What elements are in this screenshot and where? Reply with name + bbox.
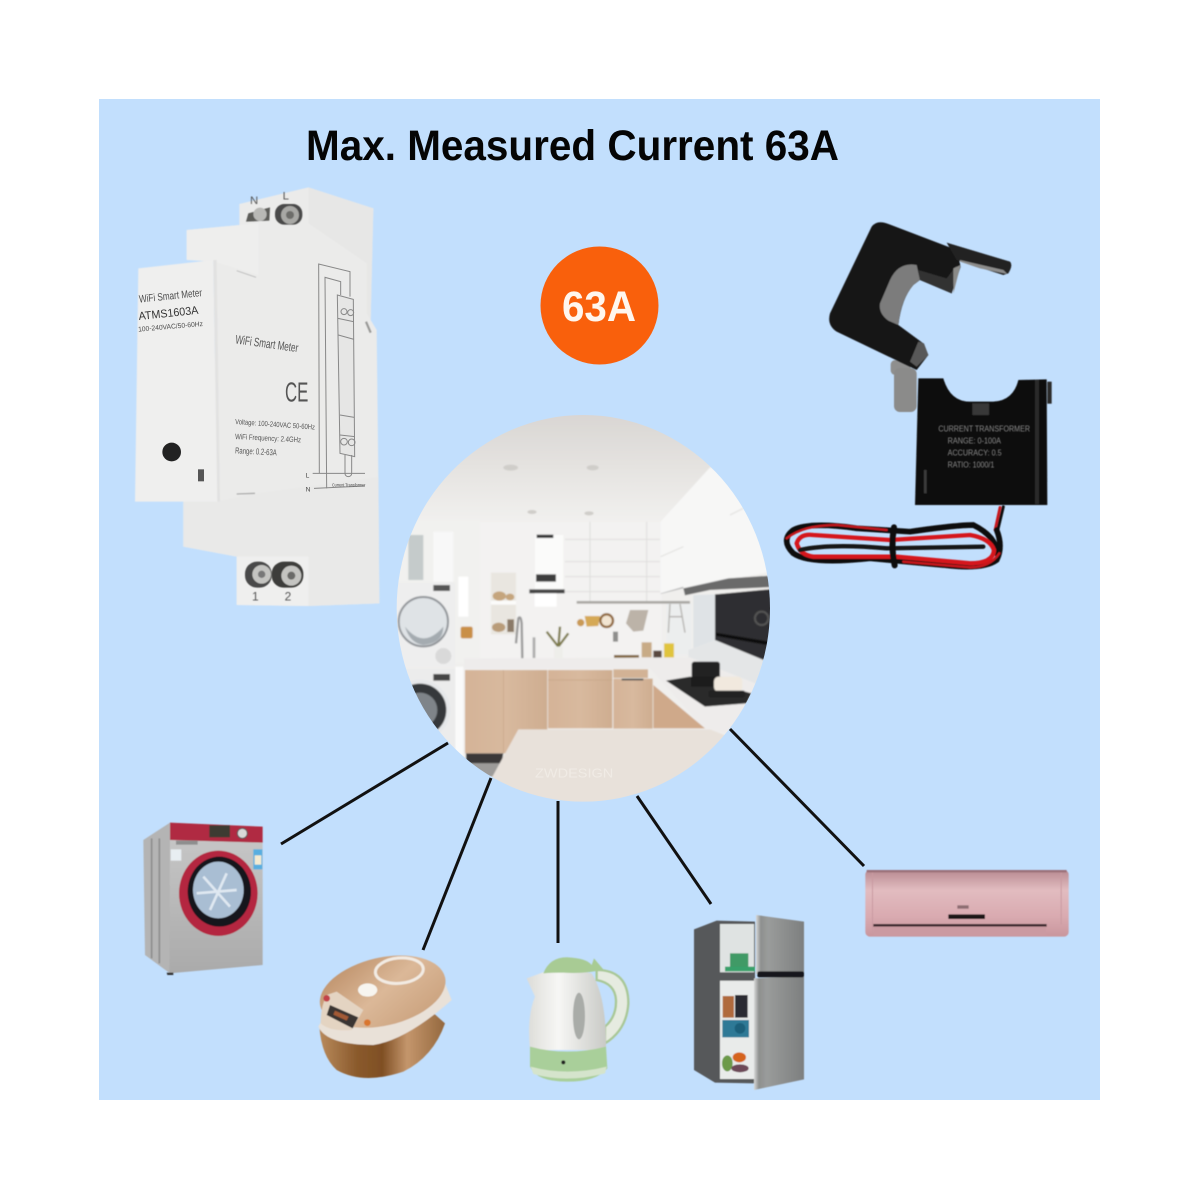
clamp upper jaw <box>829 222 1011 370</box>
side label: Range: 0.2-63A <box>235 445 277 458</box>
countertop <box>478 656 754 685</box>
upper cabinets <box>661 468 766 594</box>
indicator button <box>162 443 204 481</box>
bottom terminals: 1 <box>252 590 259 604</box>
badge: 63A <box>540 246 658 364</box>
ceiling <box>442 415 710 484</box>
air conditioner <box>865 870 1069 937</box>
sink and plant <box>514 616 570 659</box>
top terminals: L <box>283 190 289 202</box>
wiring labels <box>306 472 366 493</box>
current transformer clamp <box>787 222 1052 567</box>
wall boiler <box>529 535 565 607</box>
front label: WiFi Smart Meter <box>138 287 203 306</box>
floor and toe kick <box>457 753 503 777</box>
front label: 100-240VAC/50-60Hz <box>138 321 204 334</box>
smart meter device <box>135 187 379 606</box>
wall niche <box>491 573 516 634</box>
background panel <box>99 99 1100 1100</box>
clamp specification text <box>938 425 1030 469</box>
counter items <box>614 642 674 662</box>
front label <box>138 287 204 334</box>
appliances: washer, rice cooker, kettle <box>143 823 628 1082</box>
refrigerator <box>694 915 804 1090</box>
oven and backsplash <box>689 588 770 683</box>
rice cooker <box>313 944 453 1078</box>
appliances: fridge, air conditioner <box>694 870 1069 1090</box>
wiring labels: Current Transformer <box>332 482 366 488</box>
clamp lower body <box>915 378 1052 505</box>
side label: CE <box>285 377 308 408</box>
stacked washer and dryer <box>390 577 473 757</box>
connector lines <box>281 729 864 950</box>
foreground countertop <box>492 728 724 802</box>
coiled cable <box>787 507 1003 567</box>
back wall tiles <box>589 538 648 593</box>
left wall and window <box>408 532 453 581</box>
wiring labels: L <box>306 472 310 479</box>
bottom terminals <box>245 562 303 604</box>
clamp specification text: CURRENT TRANSFORMER <box>938 425 1030 434</box>
cooktop and pots <box>666 662 752 707</box>
wood cabinets <box>465 669 705 753</box>
clamp specification text: RATIO: 1000/1 <box>948 459 995 469</box>
washing machine <box>143 823 263 975</box>
kettle <box>527 957 628 1082</box>
clamp specification text: RANGE: 0-100A <box>948 435 1001 445</box>
top terminals <box>246 190 302 225</box>
watermark: ZWDESIGN <box>535 766 613 781</box>
kitchen photo circle <box>390 410 780 810</box>
side label: WiFi Frequency: 2.4GHz <box>235 432 301 444</box>
infographic canvas <box>99 99 1100 1100</box>
side label: WiFi Smart Meter <box>235 332 299 355</box>
side label <box>235 332 316 458</box>
front label: ATMS1603A <box>138 305 199 323</box>
title: Max. Measured Current 63A <box>306 122 839 170</box>
utensil rail <box>577 601 690 642</box>
badge: 63A: 63A <box>562 283 636 331</box>
clamp specification text: ACCURACY: 0.5 <box>948 447 1002 457</box>
wiring diagram <box>313 264 365 488</box>
side label: Voltage: 100-240VAC 50-60Hz <box>235 417 316 432</box>
top terminals: N <box>250 195 258 207</box>
wiring labels: N <box>306 486 311 493</box>
clamp hinge <box>891 360 917 412</box>
bottom terminals: 2 <box>285 590 292 604</box>
range hood <box>683 575 780 595</box>
